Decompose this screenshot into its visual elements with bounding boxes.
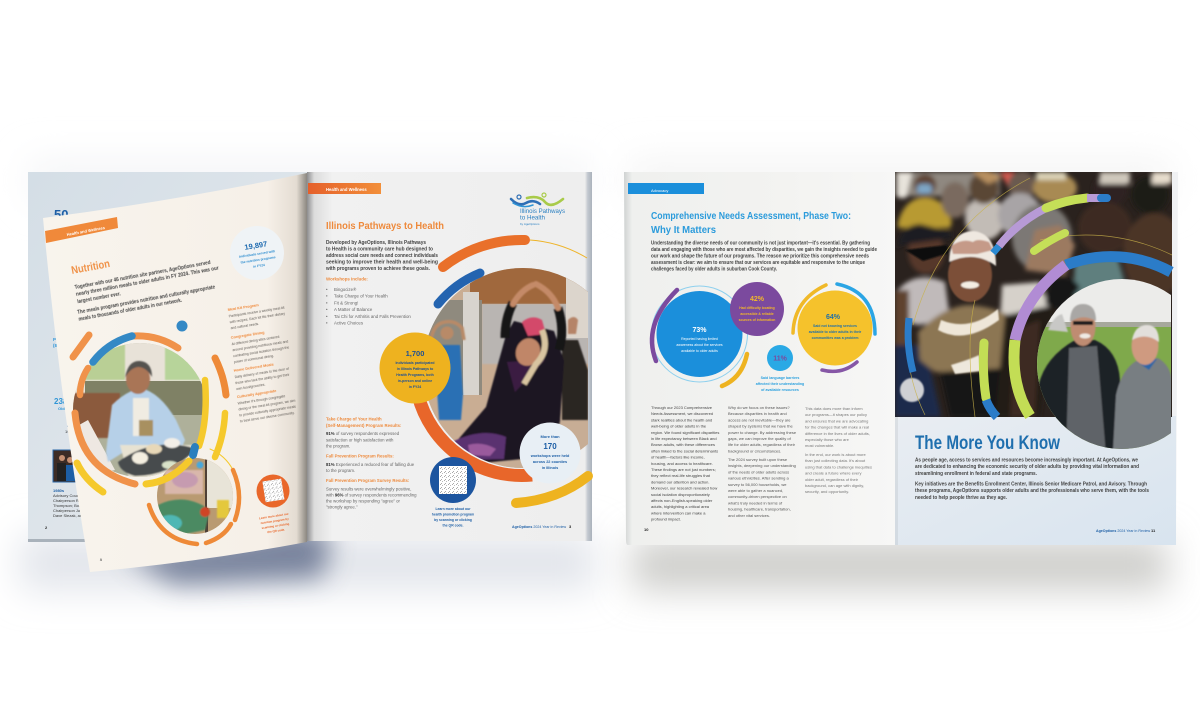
11% caption: Said language barriers (761, 376, 799, 380)
workshop list: • (326, 307, 328, 312)
column 3 text: difference in the lives of older adults, (805, 431, 870, 436)
sidebar: meal programs: Meal Kit Program (228, 303, 260, 312)
stat circle: 11% (767, 345, 793, 371)
column 2 text (728, 405, 797, 518)
sidebar: meal programs: Congregate Dining (231, 330, 265, 340)
intro paragraph: our work and shape the future of our programs. The reason we prioritize this comprehensive needs (651, 254, 869, 260)
ring: nutrition blue arc top (93, 336, 132, 362)
column 1 text: well-being of older adults in the (651, 424, 707, 429)
column 2 text: gaps, we can improve the quality of (728, 436, 792, 441)
QR caption: nutrition program by (260, 517, 289, 525)
stat circle: 64% (793, 284, 875, 371)
intro paragraph (325, 240, 438, 272)
stat: 19,897 individuals: in FY24 (253, 263, 265, 269)
QR caption: Learn more about our (435, 507, 471, 511)
column 3 text: In the end, our work is about more (805, 452, 866, 457)
stat circle: 11%: 11% (773, 356, 788, 362)
ring: lower yellow arc (516, 476, 588, 503)
intro paragraph: nearly three million meals to older adults in FY 2024. This was our (76, 266, 219, 298)
ring: inner green arc (1014, 340, 1030, 416)
program results text: the program. (326, 444, 350, 448)
column 1 text: often linked to the social determinants (651, 448, 718, 453)
stat: 170 workshops: workshops were held (530, 454, 570, 458)
column 2 text: were able to gather a nuanced, (728, 488, 783, 493)
program results text: satisfaction or high satisfaction with (326, 438, 394, 442)
workshop list: • (326, 287, 328, 292)
title: Why It Matters (651, 224, 716, 236)
left foreground figure (895, 224, 952, 417)
ring: outer small arc end (1087, 194, 1104, 202)
stat: 1,700 participants: in Illinois Pathways to (397, 367, 433, 371)
program results text: "strongly agree." (326, 504, 358, 510)
program results text (326, 416, 417, 510)
intro paragraph: challenges faced by older adults in suburban Cook County. (651, 266, 778, 272)
sidebar: meal programs: around providing nutritious meals and (232, 339, 289, 352)
sidebar: meal programs: Daily delivery of meals to the door of (234, 367, 289, 379)
ring: green pill (1034, 233, 1065, 251)
logo: Illinois Pathways to Health: to Health (520, 216, 545, 222)
tag: Advocacy (628, 183, 704, 194)
back page fragments: Advisory Coun (53, 493, 79, 498)
column 1 text: Moreover, our research revealed how (651, 486, 717, 491)
stat circle: 64%: Said not knowing services (813, 324, 857, 328)
column 1 text: demand our attention and action. (651, 479, 710, 484)
title: Comprehensive Needs Assessment, Phase Two: (651, 210, 851, 222)
column 3 text: background, can age with dignity, (805, 483, 864, 488)
stat: 170 workshops: in Illinois (542, 466, 558, 470)
column 3 text: especially those who are (805, 437, 850, 442)
ring: nutrition orange arc top (133, 336, 178, 348)
workshop list: Take Charge of Your Health (334, 294, 388, 299)
column 2 text: insights, deepening our understanding (728, 463, 796, 468)
column 1 text (651, 405, 719, 522)
tag: Advocacy: Advocacy (651, 188, 668, 193)
intro paragraph (651, 240, 877, 272)
program results text: (Self-Management) Program Results: (326, 423, 402, 428)
footer: AgeOptions 2024 Year in Review (1096, 529, 1151, 533)
page number: 3 (569, 524, 572, 529)
title: Illinois Pathways to Health (326, 221, 444, 232)
column 2 text: life for older adults, regardless of their (728, 442, 796, 447)
column 1 text: they reflect real-life struggles that (651, 473, 711, 478)
body paragraphs: these programs, AgeOptions supports older adults and the professionals who serve them, with the tools (915, 488, 1149, 494)
QR caption: the QR code. (267, 527, 286, 534)
sidebar: meal programs: dining or the meal kit program, we aim (238, 399, 296, 412)
sidebar: meal programs: Culturally Appropriate (237, 389, 277, 399)
intro paragraph: largest number ever. (77, 291, 122, 305)
back page fragments: Thompson; Boar (53, 503, 83, 508)
panel: Illinois Pathways to Health page (307, 172, 592, 541)
back page fragments: 238 (54, 397, 68, 406)
intro paragraph (72, 259, 224, 323)
title (651, 210, 851, 236)
ring: outer green arc (1046, 198, 1087, 208)
column 1 text: Through our 2023 Comprehensive (651, 405, 713, 410)
ring: left blue arc (986, 400, 997, 417)
photo: crowd (895, 170, 1187, 417)
sidebar: meal programs: Home Delivered Meals (234, 363, 274, 373)
column 1 text: Needs Assessment, we discovered (651, 411, 713, 416)
tag: Health and Wellness: Health and Wellness (66, 225, 106, 237)
workshop list: • (326, 294, 328, 299)
11% caption: of available resources (761, 388, 799, 392)
ring lines: thin yellow (910, 178, 1172, 417)
QR caption: by scanning or clicking (434, 518, 472, 522)
tag: Health and Wellness (45, 217, 118, 243)
intro paragraph: address social care needs and connect individuals (326, 253, 438, 259)
stat: 1,700 participants: Health Programs, both (396, 373, 434, 377)
stat circle: 64%: 64% (826, 314, 841, 321)
program results text: 81% Experienced a reduced fear of falling due (326, 462, 415, 467)
body paragraphs: needed to help people thrive as they age. (915, 495, 1008, 501)
stat circle: 73%: 73% (692, 327, 707, 334)
sidebar: meal programs: Whether it's through congregate (237, 394, 286, 406)
photo: two men (1035, 279, 1175, 455)
back page fragments: Pag (53, 337, 62, 342)
workshop list: Bingocize® (334, 287, 357, 292)
page number: 11 (1151, 528, 1156, 533)
column 1 text: of health—factors like income, (651, 455, 705, 460)
intro paragraph: data and engaging with those who are most affected by disparities, we gain the insights needed to guide (651, 247, 877, 253)
workshop list: • (326, 300, 328, 305)
stat: 19,897 individuals (230, 226, 284, 280)
QR caption: health promotion program (432, 512, 474, 516)
QR caption (432, 507, 474, 528)
stat circle: 64%: available to older adults in their (809, 330, 862, 334)
column 2 text: shaped by systems that we have the (728, 424, 793, 429)
column 1 text: adults, highlighting a critical area (651, 504, 710, 509)
stat circle: 73% (652, 286, 748, 386)
column 1 text: region. We found significant disparities (651, 430, 719, 435)
sidebar: meal programs: Participants receive a weekly meal kit (229, 306, 285, 318)
column 3 text: This data does more than inform (805, 406, 863, 411)
stat: 170 workshops: More than (540, 434, 560, 439)
column 2 text: what's truly needed in terms of (728, 500, 783, 505)
back page fragments: Dave Slezak, and (53, 513, 84, 518)
column 1 text: where intervention can make a (651, 510, 706, 515)
panel: flipped Nutrition page (43, 173, 307, 572)
column 2 text: background or circumstances. (728, 448, 781, 453)
sidebar: meal programs: and cultural needs. (230, 322, 259, 330)
back page fragments: 50 (54, 207, 68, 222)
intro paragraph: with programs proven to achieve these goals. (325, 266, 431, 272)
workshop list: Active Choices (334, 320, 364, 326)
photo: woman at meal table (73, 343, 202, 477)
workshop list: • (326, 314, 328, 319)
column 1 text: affects non-English-speaking older (651, 498, 713, 503)
body paragraphs (915, 458, 1149, 501)
column 1 text: These findings are not just numbers; (651, 467, 716, 472)
intro paragraph: assessment is clear: we aim to ensure that our services are equitable and responsive to the unique (651, 260, 865, 266)
body paragraphs: Key initiatives are the Benefits Enrollment Center, Illinois Senior Medicare Patrol, and Avisory. Through (915, 482, 1147, 488)
back page fragments: 197 (65, 429, 72, 434)
11% caption: affected their understanding (756, 382, 804, 386)
column 2 text: community-driven perspective on (728, 494, 787, 499)
stat: 170 workshops (520, 422, 580, 484)
intro paragraph: meals to thousands of older adults in our network. (78, 298, 183, 323)
panel: back page behind flipped page (28, 172, 307, 542)
program results text: with 96% of survey respondents recommending (326, 492, 417, 498)
sidebar: meal programs: those who lack the ability to get their (235, 373, 291, 385)
stat: 1,700 participants: in-person and online (398, 379, 432, 383)
intro paragraph: Developed by AgeOptions, Illinois Pathways (326, 240, 426, 246)
QR caption (259, 512, 292, 535)
ring: inner blue arc (1066, 257, 1171, 272)
column 3 text: for the changes that will make a real (805, 425, 869, 430)
stat: 1,700 participants: Individuals participated (395, 361, 435, 365)
QR caption: Learn more about our (259, 512, 290, 520)
photo: food box (157, 458, 233, 534)
column 2 text: The 2024 survey built upon these (728, 457, 788, 462)
column 1 text: profound impact. (651, 517, 681, 522)
sidebar: meal programs: to best serve our diverse community. (240, 411, 295, 423)
ring: far-left blue arc (908, 318, 913, 372)
intro paragraph: The meals program provides nutrition and culturally appropriate (77, 284, 216, 316)
column 2 text: Because disparities in health and (728, 411, 787, 416)
jersey and lower dark (918, 305, 1055, 417)
sidebar: meal programs: to provide culturally appropriate meals (239, 405, 296, 417)
back page fragments: 2 (45, 525, 48, 530)
intro paragraph: seeking to improve their health and well-being (326, 260, 438, 266)
column 2 text: survey to 56,000 households, we (728, 482, 787, 487)
panel: The More You Know page (895, 170, 1187, 545)
back page fragments: 1980s (53, 488, 65, 493)
logo: Illinois Pathways to Health (511, 193, 565, 226)
stat: 1,700 participants: 1,700 (406, 349, 424, 358)
program results text: Take Charge of Your Health (326, 416, 382, 422)
column 2 text: various ethnicities. After sending a (728, 476, 789, 481)
stat: 19,897 individuals: 19,897 (244, 239, 268, 252)
intro paragraph: Together with our 46 nutrition site partners, AgeOptions served (74, 260, 211, 291)
back page fragments (45, 207, 84, 530)
program results text: Fall Prevention Program Survey Results: (326, 478, 410, 483)
column 3 text: security, and opportunity. (805, 489, 849, 494)
stat circle: 42%: sources of information (739, 318, 775, 322)
ring: left green arc (983, 343, 986, 398)
ring: blue arc (438, 273, 480, 304)
column 2 text: Why do we focus on these issues? (728, 405, 790, 410)
photo: woman stretching (420, 268, 590, 473)
QR caption: scanning or clicking (261, 522, 290, 530)
back page fragments: Chairperson Jan (53, 508, 82, 513)
ring: thin yellow arc (530, 240, 587, 258)
stat circle: 42% (730, 282, 784, 336)
QR code: orange (256, 474, 290, 508)
column 1 text: in life expectancy between Black and (651, 436, 717, 441)
body paragraphs: are dedicated to enhancing the economic security of older adults by providing vital information and (915, 464, 1139, 470)
program results text: to the program. (326, 468, 355, 473)
workshop list: Fit & Strong! (334, 300, 358, 305)
tag: Health and Wellness: Health and Wellness (326, 187, 367, 192)
workshop list (326, 276, 411, 326)
column 1 text: social isolation disproportionately (651, 492, 710, 497)
ring: inner purple arc (1015, 265, 1066, 340)
stat: 1,700 participants: in FY24 (409, 385, 421, 389)
body paragraphs: As people age, access to services and resources become increasingly important. At AgeOptions, we (915, 458, 1138, 464)
sidebar: meal programs (222, 299, 301, 423)
title: Nutrition: Nutrition (70, 258, 111, 277)
stat circle: 42%: Had difficulty locating (739, 306, 775, 310)
QR code: blue (430, 457, 476, 503)
column 2 text: of the needs of older adults across (728, 469, 789, 474)
intro paragraph: Understanding the diverse needs of our community is not just important—it's essential. By gathering (651, 240, 870, 246)
stat circle: 73%: available to older adults (681, 349, 718, 353)
column 3 text: most vulnerable. (805, 443, 834, 448)
ring: outer purple arc (999, 208, 1046, 246)
column 1 text: stark realities about the health and (651, 417, 712, 422)
column 3 text: and create a future where every (805, 471, 861, 476)
logo: Illinois Pathways to Health: Illinois Pathways (520, 209, 565, 215)
ring: food photo arcs (149, 449, 239, 544)
page number: 4 (100, 558, 102, 562)
footer: AgeOptions 2024 Year in Review (512, 525, 567, 529)
column 3 text: than just collecting data. It's about (805, 458, 866, 463)
ring: nutrition pills and arcs (73, 320, 226, 492)
column 3 text: using that data to challenge inequities (805, 464, 872, 469)
ring: orange arc (418, 395, 532, 476)
workshop list: A Matter of Balance (334, 307, 373, 312)
program results text: the workshop by responding "agree" or (326, 498, 401, 504)
sidebar: meal programs: At different dining sites centered (231, 335, 280, 346)
page number: 10 (644, 527, 649, 532)
column 3 text: and ensures that we are advocating (805, 418, 868, 423)
column 2 text: housing, healthcare, transportation, (728, 507, 791, 512)
stat circle: 42%: accessible & reliable (740, 312, 774, 316)
soft backdrop shadows (20, 160, 1170, 590)
stat: 170 workshops: 170 (543, 442, 557, 451)
column 1 text: Brown adults, with these differences (651, 442, 715, 447)
column 1 text: housing, and access to healthcare. (651, 461, 713, 466)
body paragraphs: streamlining enrollment in federal and state programs. (915, 471, 1038, 477)
intro paragraph: to Health is a community care hub designed to (326, 246, 433, 252)
column 3 text: our programs—it shapes our policy (805, 412, 867, 417)
sidebar: meal programs: combating social isolation through the (233, 345, 290, 358)
workshop list: • (326, 320, 328, 326)
workshop list: Tai Chi for Arthritis and Falls Prevention (334, 314, 411, 319)
back page fragments: Older (58, 406, 69, 411)
program results text: Fall Prevention Program Results: (326, 454, 394, 458)
column 3 text (805, 406, 872, 494)
stat: 19,897 individuals: the nutrition programs (240, 255, 276, 265)
program results text: Survey results were overwhelmingly positive, (326, 486, 412, 492)
top background crowd (895, 172, 1172, 319)
11% caption (756, 376, 804, 392)
column 2 text: power to change. By addressing these (728, 430, 797, 435)
sidebar: meal programs: power of communal dining. (234, 354, 274, 364)
back page fragments: Chairperson Ro (53, 498, 82, 503)
workshop list: Workshops include: (326, 276, 368, 282)
heading: The More You Know: The More You Know (915, 433, 1060, 454)
stat circle: 42%: 42% (750, 296, 765, 303)
column 3 text: older adult, regardless of their (805, 477, 859, 482)
tag: Health and Wellness (308, 183, 381, 194)
stat: 19,897 individuals: Individuals served with (239, 249, 275, 259)
sidebar: meal programs: own food/groceries. (236, 383, 266, 391)
sidebar: meal programs: with recipes. Each kit fits their dietary (229, 312, 286, 324)
back page fragments: (80 (53, 343, 60, 348)
stat circle: 73%: awareness about the services (676, 343, 723, 347)
program results text: 91% of survey respondents expressed (326, 431, 400, 436)
logo: Illinois Pathways to Health: by AgeOptions (520, 222, 540, 226)
column 2 text: and other vital services. (728, 513, 770, 518)
panel: Needs Assessment page (624, 172, 896, 545)
stat circle: 73%: Reported having limited (681, 337, 718, 341)
ring: top orange arc (443, 240, 525, 267)
QR caption: the QR code. (443, 524, 464, 528)
stat circle: 64%: communities was a problem (812, 336, 858, 340)
stat: 170 workshops: across 22 counties (533, 460, 567, 464)
stat: 1,700 participants (380, 332, 450, 404)
column 2 text: access are not inevitable—they are (728, 417, 791, 422)
